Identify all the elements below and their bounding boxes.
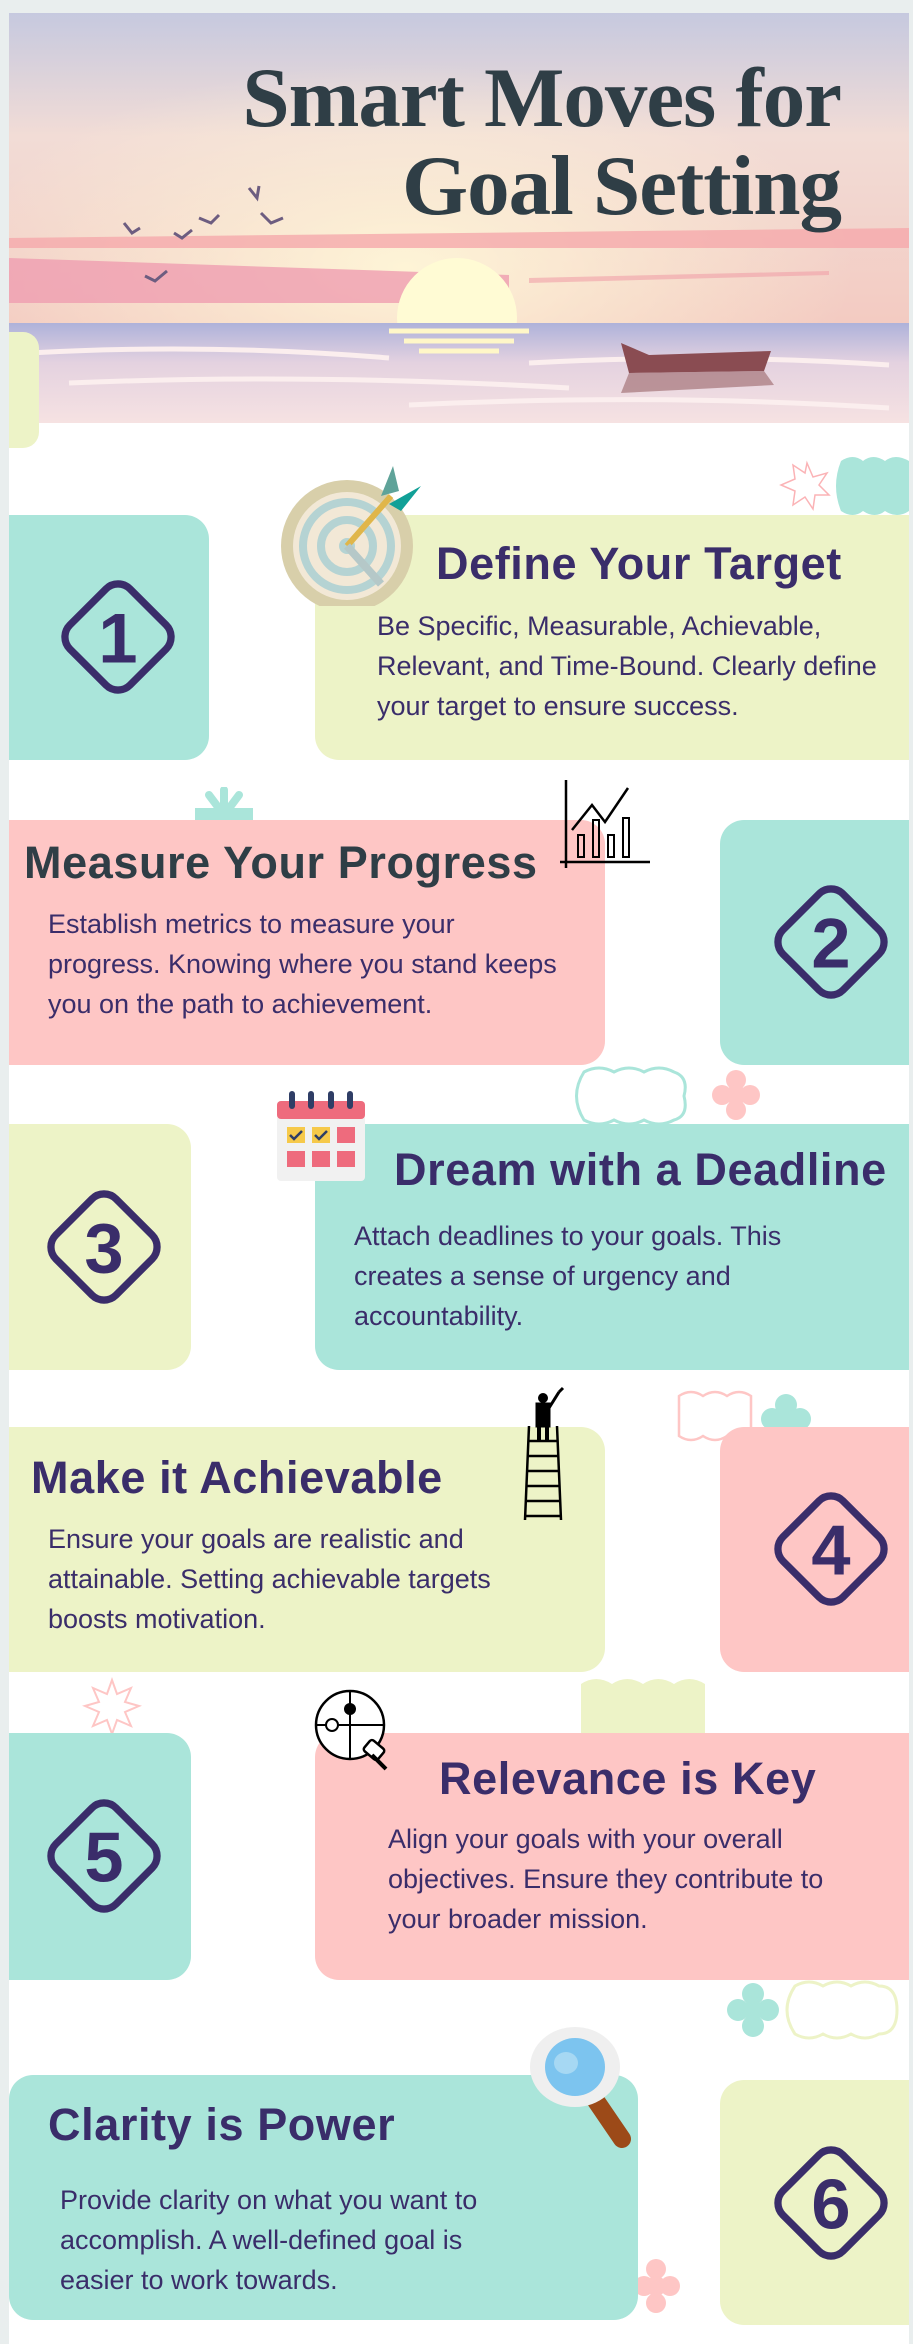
- number 6: [774, 2146, 888, 2260]
- body 1: your target to ensure success.: [377, 691, 739, 721]
- body 4: attainable. Setting achievable targets: [48, 1564, 491, 1594]
- body 6: accomplish. A well-defined goal is: [60, 2225, 462, 2255]
- number box 2: [720, 820, 909, 1065]
- decor: pink flower: [638, 2259, 680, 2313]
- decor: green tab: [9, 332, 39, 448]
- body 1: Be Specific, Measurable, Achievable,: [377, 611, 821, 641]
- icon: person on ladder: [524, 1387, 564, 1520]
- number 3: [47, 1190, 161, 1304]
- body 5: [388, 1824, 823, 1934]
- text box 2: [9, 820, 605, 1065]
- text box 5: [315, 1733, 909, 1980]
- panel 5: [9, 1677, 909, 1980]
- number 5: 5: [84, 1817, 124, 1896]
- number 4: 4: [811, 1510, 851, 1589]
- text box 6: [9, 2075, 638, 2320]
- decor: teal flower + green wave outline: [727, 1980, 898, 2040]
- body 2: you on the path to achievement.: [48, 989, 432, 1019]
- number box 1: [9, 515, 209, 760]
- body 4: [48, 1524, 491, 1634]
- number box 5: [9, 1733, 191, 1980]
- heading 6: Clarity is Power: [48, 2099, 395, 2150]
- number box 4: [720, 1427, 909, 1672]
- body 3: accountability.: [354, 1301, 523, 1331]
- body 6: Provide clarity on what you want to: [60, 2185, 477, 2215]
- body 2: Establish metrics to measure your: [48, 909, 455, 939]
- panel 1: [9, 457, 909, 760]
- body 4: Ensure your goals are realistic and: [48, 1524, 464, 1554]
- body 5: objectives. Ensure they contribute to: [388, 1864, 823, 1894]
- body 6: [60, 2185, 477, 2295]
- icon: puzzle head: [314, 1690, 388, 1770]
- text box 3: [315, 1124, 909, 1370]
- body 5: Align your goals with your overall: [388, 1824, 783, 1854]
- birds: [124, 186, 283, 281]
- decor: green wave: [581, 1679, 705, 1733]
- icon: magnifier: [530, 2027, 631, 2148]
- heading 1: Define Your Target: [436, 538, 842, 589]
- text box 4: [9, 1427, 605, 1672]
- body 3: Attach deadlines to your goals. This: [354, 1221, 781, 1251]
- heading 2: Measure Your Progress: [24, 837, 538, 888]
- header: sunset scene: [9, 13, 909, 423]
- decor: flower outline and wave: [779, 457, 909, 515]
- header title: Smart Moves for: [242, 51, 841, 145]
- decor: pink outline flower: [82, 1677, 142, 1733]
- body 1: [377, 611, 877, 721]
- heading 3: Dream with a Deadline: [394, 1144, 887, 1195]
- number 2: [774, 885, 888, 999]
- body 4: boosts motivation.: [48, 1604, 266, 1634]
- heading 4: Make it Achievable: [31, 1452, 443, 1503]
- panel 4: [9, 1387, 909, 1672]
- decor: wave outline + pink flower: [575, 1066, 760, 1124]
- panel 6: [9, 1980, 909, 2325]
- decor: teal leaf: [195, 787, 253, 820]
- icon: calendar: [277, 1091, 365, 1181]
- header title: [242, 51, 842, 233]
- body 6: easier to work towards.: [60, 2265, 338, 2295]
- number 2: 2: [811, 903, 851, 982]
- panel 2: [9, 780, 909, 1065]
- body 3: [354, 1221, 781, 1331]
- number 1: 1: [98, 598, 138, 677]
- icon: chart: [560, 780, 650, 868]
- number 4: [774, 1492, 888, 1606]
- body 2: progress. Knowing where you stand keeps: [48, 949, 557, 979]
- number 5: [47, 1799, 161, 1913]
- body 3: creates a sense of urgency and: [354, 1261, 731, 1291]
- number 3: 3: [84, 1208, 124, 1287]
- sun: [397, 258, 517, 378]
- number 1: [61, 580, 175, 694]
- icon: target: [281, 466, 421, 606]
- number box 3: [9, 1124, 191, 1370]
- decor: pink wave outline + teal flower: [678, 1390, 811, 1442]
- body 1: Relevant, and Time-Bound. Clearly define: [377, 651, 877, 681]
- body 5: your broader mission.: [388, 1904, 648, 1934]
- panel 3: [9, 1066, 909, 1370]
- heading 5: Relevance is Key: [439, 1753, 816, 1804]
- number box 6: [720, 2080, 909, 2325]
- body 2: [48, 909, 557, 1019]
- number 6: 6: [811, 2164, 851, 2243]
- text box 1: [315, 515, 909, 760]
- boat: [621, 343, 774, 393]
- header title: Goal Setting: [402, 139, 841, 233]
